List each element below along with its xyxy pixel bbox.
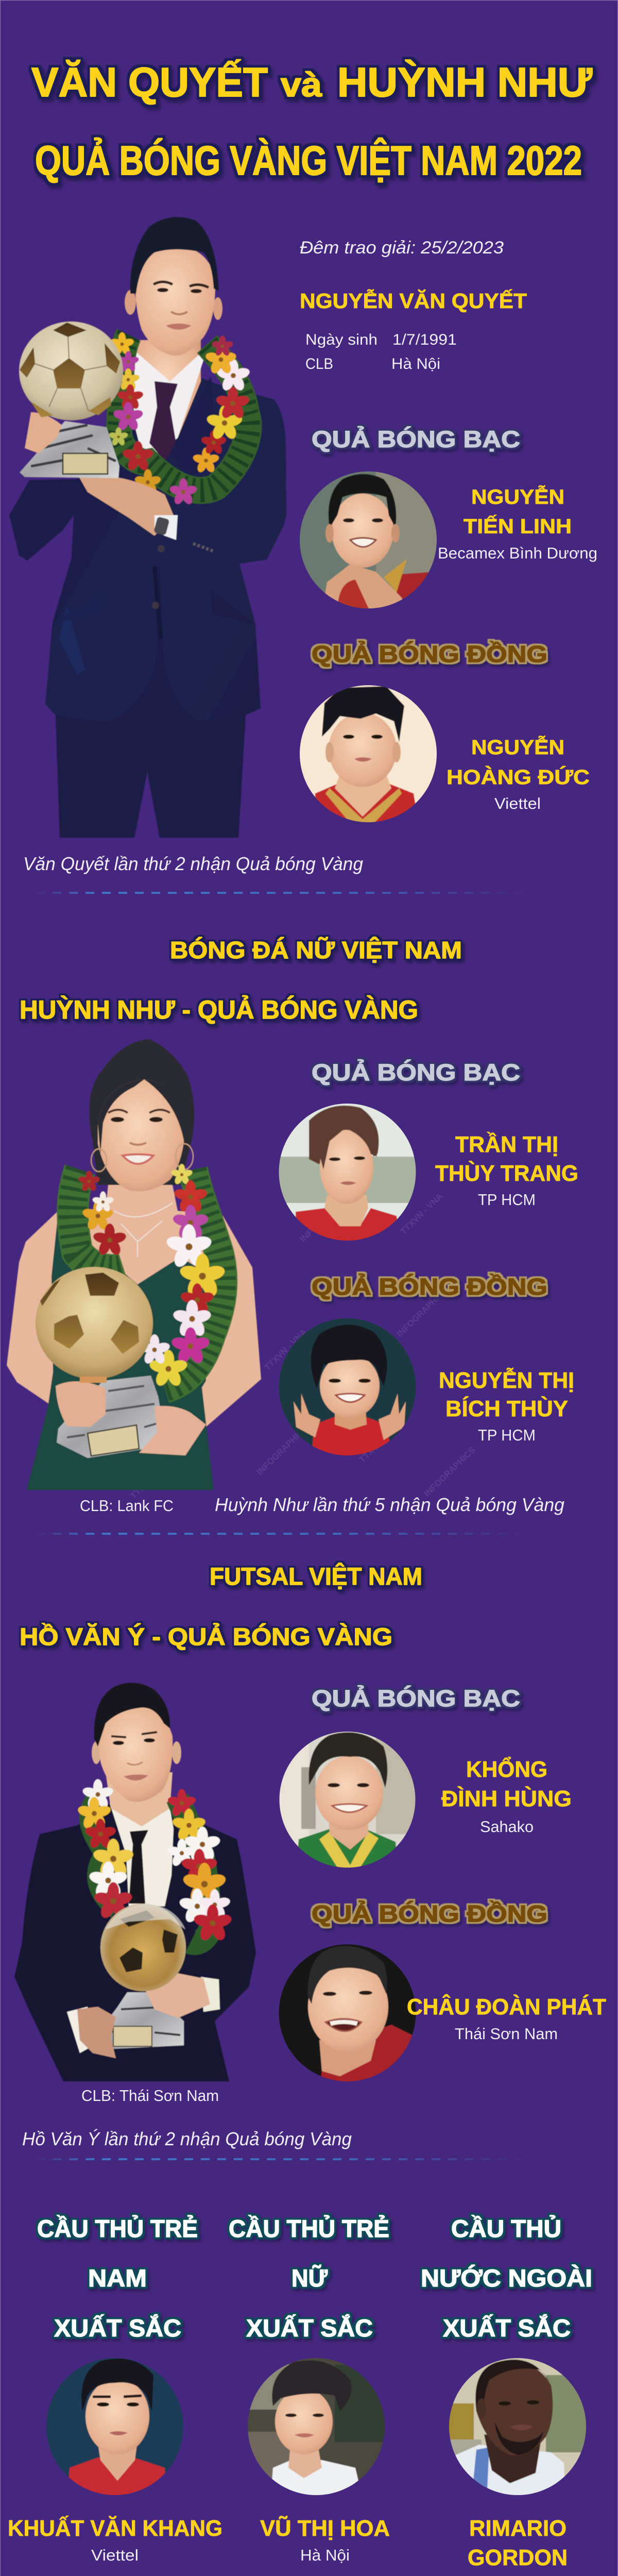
name: Nguyễn Thị Bích Thùy: NGUYỄN THỊ — [439, 1367, 574, 1393]
silver ball women: QUẢ BÓNG BẠC — [312, 1059, 520, 1086]
column heading: best foreign player: XUẤT SẮC — [443, 2314, 571, 2342]
column heading: best young male: NAM — [88, 2264, 147, 2292]
caption: Hồ Văn Ý: Hồ Văn Ý lần thứ 2 nhận Quả bóng Vàng — [22, 2128, 352, 2149]
name: Vũ Thị Hoa — [260, 2515, 390, 2564]
watermarks: TTXVN - VNA — [399, 1191, 445, 1236]
watermarks: INFOGRAPHICS — [298, 1191, 354, 1244]
portrait: Nguyễn Tiến Linh — [300, 471, 437, 608]
heading: futsal: FUTSAL VIỆT NAM — [210, 1563, 422, 1590]
column heading: best young female: NỮ — [291, 2264, 328, 2292]
name: Vũ Thị Hoa: VŨ THỊ HOA — [260, 2515, 390, 2541]
name: Trần Thị Thùy Trang: THÙY TRANG — [435, 1160, 578, 1186]
column heading: best young male: CẦU THỦ TRẺ — [37, 2215, 198, 2242]
photo: Hồ Văn Ý holding trophy — [14, 1683, 256, 2081]
heading: women's football: BÓNG ĐÁ NỮ VIỆT NAM — [170, 937, 462, 963]
winner details — [305, 331, 457, 372]
name: Trần Thị Thùy Trang: TRẦN THỊ — [455, 1131, 558, 1157]
winner name: NGUYỄN VĂN QUYẾT — [300, 289, 527, 313]
column heading: best young female: XUẤT SẮC — [246, 2314, 373, 2342]
winner details: Hà Nội — [391, 355, 440, 372]
title: VĂN QUYẾT — [31, 59, 268, 105]
watermarks: INFOGRAPHICS — [395, 1285, 450, 1339]
name: Nguyễn Hoàng Đức: Viettel — [494, 794, 541, 812]
column heading: best young male — [37, 2215, 198, 2342]
award date: Đêm trao giải: 25/2/2023 — [300, 238, 504, 258]
watermarks: TTXVN - VNA — [129, 1455, 175, 1501]
name: Nguyễn Hoàng Đức: HOÀNG ĐỨC — [447, 765, 590, 789]
winner details: Ngày sinh — [305, 331, 377, 348]
name: Nguyễn Thị Bích Thùy: TP HCM — [478, 1426, 536, 1444]
name: Khuất Văn Khang: Viettel — [91, 2546, 139, 2564]
portrait: Rimario Gordon — [449, 2358, 586, 2495]
heading: Hồ Văn Ý gold ball: HỒ VĂN Ý - QUẢ BÓNG VÀNG — [20, 1623, 392, 1650]
watermarks: TTXVN - VNA — [357, 1419, 404, 1465]
column heading: best foreign player: CẦU THỦ — [451, 2215, 561, 2242]
name: Châu Đoàn Phát — [407, 1994, 606, 2043]
caption: Huỳnh Như: Huỳnh Như lần thứ 5 nhận Quả bóng Vàng — [215, 1494, 564, 1515]
title: HUỲNH NHƯ — [337, 59, 593, 105]
column heading: best young male: XUẤT SẮC — [54, 2314, 181, 2342]
watermarks — [129, 1191, 477, 1501]
name: Trần Thị Thùy Trang: TP HCM — [478, 1191, 536, 1209]
bronze ball futsal: QUẢ BÓNG ĐỒNG — [312, 1901, 547, 1927]
portrait: Khổng Đình Hùng — [279, 1732, 415, 1868]
club: Huỳnh Như: CLB: Lank FC — [80, 1497, 174, 1515]
name: Nguyễn Tiến Linh: Becamex Bình Dương — [438, 544, 597, 562]
silver ball futsal: QUẢ BÓNG BẠC — [312, 1685, 520, 1711]
name: Nguyễn Tiến Linh: TIẾN LINH — [464, 514, 572, 538]
portrait: Vũ Thị Hoa — [248, 2358, 385, 2495]
name: Nguyễn Tiến Linh: NGUYỄN — [471, 485, 564, 509]
name: Châu Đoàn Phát: Thái Sơn Nam — [455, 2025, 558, 2043]
name: Nguyễn Thị Bích Thùy — [439, 1367, 574, 1444]
column heading: best foreign player — [421, 2215, 592, 2342]
name: Trần Thị Thùy Trang — [435, 1131, 578, 1209]
name: Khổng Đình Hùng: KHỔNG — [466, 1756, 547, 1782]
photo: Huỳnh Như holding trophy — [7, 1039, 261, 1490]
name: Khổng Đình Hùng — [441, 1756, 572, 1836]
name: Khuất Văn Khang: KHUẤT VĂN KHANG — [8, 2515, 222, 2541]
name: Nguyễn Hoàng Đức: NGUYỄN — [471, 735, 564, 759]
name: Rimario Gordon: GORDON — [468, 2545, 568, 2570]
heading: Huỳnh Như gold ball: HUỲNH NHƯ - QUẢ BÓNG VÀNG — [20, 995, 418, 1024]
bronze ball women: QUẢ BÓNG ĐỒNG — [312, 1274, 547, 1300]
watermarks: TTXVN - VNA — [263, 1327, 309, 1372]
name: Rimario Gordon: RIMARIO — [469, 2516, 566, 2541]
name: Nguyễn Thị Bích Thùy: BÍCH THÙY — [445, 1396, 568, 1421]
name: Rimario Gordon — [438, 2516, 597, 2576]
title — [31, 59, 593, 183]
heading: bronze ball men: QUẢ BÓNG ĐỒNG — [312, 641, 547, 667]
club: Hồ Văn Ý: CLB: Thái Sơn Nam — [81, 2087, 219, 2105]
heading: silver ball men: QUẢ BÓNG BẠC — [312, 426, 520, 452]
name: Nguyễn Tiến Linh — [438, 485, 597, 562]
portrait: Khuất Văn Khang — [46, 2358, 183, 2495]
name: Khổng Đình Hùng: Sahako — [480, 1818, 534, 1836]
title: và — [281, 65, 322, 104]
column heading: best foreign player: NƯỚC NGOÀI — [421, 2264, 592, 2292]
winner details: 1/7/1991 — [392, 331, 457, 348]
portrait: Nguyễn Hoàng Đức — [300, 685, 437, 822]
column heading: best young female: CẦU THỦ TRẺ — [229, 2215, 389, 2242]
name: Nguyễn Hoàng Đức — [447, 735, 590, 812]
name: Châu Đoàn Phát: CHÂU ĐOÀN PHÁT — [407, 1994, 606, 2020]
winner details: CLB — [305, 355, 333, 372]
watermarks: INFOGRAPHICS — [255, 1423, 310, 1477]
portrait: Trần Thị Thùy Trang — [279, 1104, 416, 1241]
column heading: best young female — [229, 2215, 389, 2342]
portrait: Nguyễn Thị Bích Thùy — [279, 1318, 416, 1455]
name: Vũ Thị Hoa: Hà Nội — [300, 2546, 350, 2564]
portrait: Châu Đoàn Phát — [279, 1944, 416, 2081]
name: Khổng Đình Hùng: ĐÌNH HÙNG — [441, 1786, 572, 1811]
watermarks: INFOGRAPHICS — [422, 1445, 477, 1499]
photo: Nguyễn Văn Quyết holding trophy — [9, 217, 286, 838]
name: Khuất Văn Khang — [8, 2515, 222, 2564]
caption: Văn Quyết: Văn Quyết lần thứ 2 nhận Quả bóng Vàng — [23, 853, 363, 874]
